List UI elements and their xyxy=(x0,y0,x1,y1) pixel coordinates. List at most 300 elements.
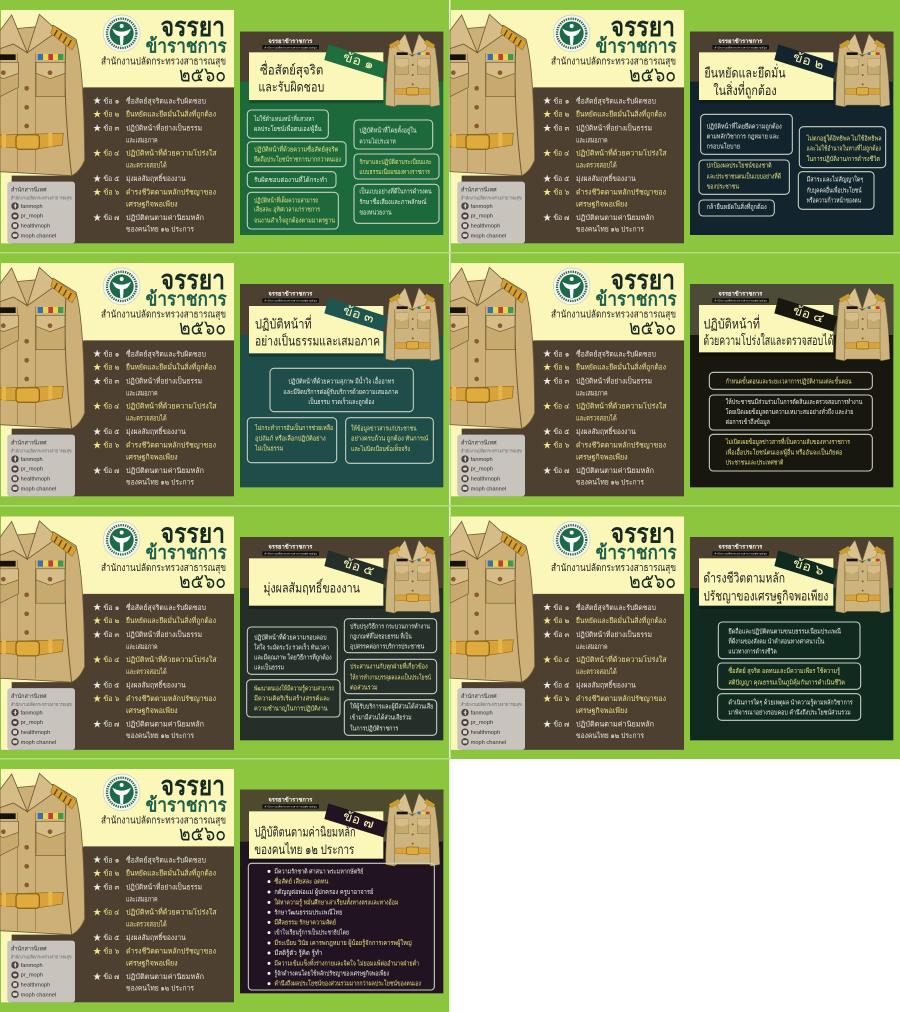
clause 5 boxes: ความชำนาญในการปฏิบัติงาน xyxy=(254,704,328,712)
social media box xyxy=(7,182,75,243)
clause 6 title: ดำรงชีวิตตามหลัก xyxy=(703,571,785,586)
clause 5 title: มุ่งผลสัมฤทธิ์ของงาน xyxy=(263,578,360,597)
main heading xyxy=(101,265,227,340)
list of seven ethics: ★ xyxy=(543,465,551,475)
list of seven ethics: ปฏิบัติตนตามค่านิยมหลัก xyxy=(576,466,654,475)
list of seven ethics xyxy=(93,854,217,993)
list of seven ethics: ของคนไทย ๑๒ ประการ xyxy=(576,731,644,740)
clause 4 boxes: ให้ประชาชนมีส่วนร่วมในการตัดสินและตรวจสอบการทำงาน xyxy=(726,398,863,406)
list of seven ethics: และตรวจสอบได้ xyxy=(126,414,167,423)
main heading: ข้าราชการ xyxy=(596,289,677,311)
list of seven ethics: ★ xyxy=(93,109,101,119)
social media box: healthmoph xyxy=(21,476,50,482)
poster 2 xyxy=(450,10,893,243)
clause 3 title: ปฏิบัติหน้าที่ xyxy=(255,314,312,331)
clause 3 boxes: อย่างครบถ้วน ถูกต้อง ทันการณ์ xyxy=(351,435,428,443)
list of seven ethics: ★ xyxy=(93,907,101,917)
clause 3 boxes: ไม่เป็นธรรม xyxy=(254,444,283,453)
social media box: สำนักงานปลัดกระทรวงสาธารณสุข xyxy=(11,448,72,454)
icon: ministry logo xyxy=(103,521,140,558)
list of seven ethics: ข้อ ๑ xyxy=(103,96,119,105)
icon: uniform shirt xyxy=(450,267,535,429)
list of seven ethics: ยืนหยัดและยึดมั่นในสิ่งที่ถูกต้อง xyxy=(126,868,216,878)
icon: ministry logo xyxy=(103,268,140,305)
ribbon: clause 3: ข้อ ๓ xyxy=(341,303,376,326)
main heading: สำนักงานปลัดกระทรวงสาธารณสุข xyxy=(551,309,676,320)
ribbon: clause 3 xyxy=(324,298,388,332)
list of seven ethics xyxy=(93,348,217,487)
clause 5 boxes: พัฒนาตนเองให้มีความรู้ความสามารถ xyxy=(254,684,334,692)
social media box: สำนักสารนิเทศ xyxy=(11,693,47,700)
list of seven ethics: เศรษฐกิจพอเพียง xyxy=(126,452,178,461)
poster 1 xyxy=(0,10,443,243)
list of seven ethics: ดำรงชีวิตตามหลักปรัชญาของ xyxy=(576,694,666,703)
list of seven ethics: ★ xyxy=(543,654,551,664)
list of seven ethics: ข้อ ๑ xyxy=(553,349,569,358)
clause 5 boxes: และมีคุณภาพ โดยวิธีการที่ถูกต้อง xyxy=(254,652,332,661)
clause 3 boxes: และไม่บิดเบือนข้อเท็จจริง xyxy=(351,444,410,453)
list of seven ethics: ยืนหยัดและยึดมั่นในสิ่งที่ถูกต้อง xyxy=(576,362,666,372)
clause 4 title: ปฏิบัติหน้าที่ xyxy=(703,314,760,331)
social media box: สำนักสารนิเทศ xyxy=(461,693,497,700)
clause 7 list box: มีความรักชาติ ศาสนา พระมหากษัตริย์ xyxy=(274,867,363,875)
social media box: สำนักสารนิเทศ xyxy=(11,187,47,194)
social media box: healthmoph xyxy=(21,223,50,229)
clause 7 list box: รักษาวัฒนธรรมประเพณีไทย xyxy=(274,908,342,916)
list of seven ethics xyxy=(543,348,667,487)
right panel 4 xyxy=(690,284,893,487)
clause 2 boxes: หรือความก้าวหน้าของตน xyxy=(807,197,861,205)
list of seven ethics: ข้อ ๒ xyxy=(103,110,119,119)
list of seven ethics: ข้อ ๗ xyxy=(553,213,570,222)
clause 1 boxes xyxy=(247,110,439,229)
icon: small shirt xyxy=(836,540,890,613)
list of seven ethics: ข้อ ๒ xyxy=(553,363,569,372)
ribbon: clause 7 xyxy=(324,803,388,837)
list of seven ethics: ข้อ ๑ xyxy=(553,603,569,612)
list of seven ethics xyxy=(543,602,667,740)
list of seven ethics: ปฏิบัติหน้าที่อย่างเป็นธรรม xyxy=(126,629,202,639)
main heading: จรรยา xyxy=(611,12,675,42)
clause 4 boxes: ต่อการเข้าถึงข้อมูล xyxy=(726,418,770,426)
list of seven ethics: ดำรงชีวิตตามหลักปรัชญาของ xyxy=(126,694,216,703)
list of seven ethics: ข้อ ๑ xyxy=(103,855,119,864)
list of seven ethics: ★ xyxy=(93,465,101,475)
right panel 5: จรรยาข้าราชการ xyxy=(268,543,313,551)
clause 7 title: ปฏิบัติตนตามค่านิยมหลัก xyxy=(254,825,356,840)
list of seven ethics: และตรวจสอบได้ xyxy=(576,161,617,170)
clause 7 list box: เข้าใจเรียนรู้การเป็นประชาธิปไตย xyxy=(274,928,349,937)
list of seven ethics: ★ xyxy=(93,173,101,183)
clause 7 list box: รู้จักดำรงตนโดยใช้หลักปรัชญาของเศรษฐกิจพอเพียง xyxy=(274,969,389,977)
ribbon: clause 4: ข้อ ๔ xyxy=(791,303,826,326)
social media box xyxy=(7,941,75,1002)
list of seven ethics: ข้อ ๖ xyxy=(103,694,120,703)
list of seven ethics: ★ xyxy=(93,376,101,386)
list of seven ethics: ข้อ ๖ xyxy=(103,947,120,956)
list of seven ethics: ★ xyxy=(543,680,551,690)
list of seven ethics: ★ xyxy=(543,719,551,729)
list of seven ethics: ★ xyxy=(93,362,101,372)
right panel 7: จรรยาข้าราชการ xyxy=(268,796,313,804)
clause 6 boxes: ซื่อสัตย์ สุจริต อดทนและมีความเพียร ใช้ความรู้ xyxy=(728,666,840,675)
list of seven ethics: ปฏิบัติตนตามค่านิยมหลัก xyxy=(126,719,204,728)
list of seven ethics: ของคนไทย ๑๒ ประการ xyxy=(126,731,194,740)
list of seven ethics: ข้อ ๕ xyxy=(553,680,570,689)
icon: small shirt xyxy=(386,34,440,107)
list of seven ethics: ★ xyxy=(543,426,551,436)
list of seven ethics: ★ xyxy=(93,187,101,197)
list of seven ethics: ★ xyxy=(93,719,101,729)
social media box: healthmoph xyxy=(471,476,500,482)
list of seven ethics: มุ่งผลสัมฤทธิ์ของงาน xyxy=(576,173,636,183)
clause 2 title: ในสิ่งที่ถูกต้อง xyxy=(713,81,777,99)
list of seven ethics: ซื่อสัตย์สุจริตและรับผิดชอบ xyxy=(126,348,206,358)
list of seven ethics: เศรษฐกิจพอเพียง xyxy=(576,706,628,715)
list of seven ethics: ข้อ ๓ xyxy=(103,377,119,386)
list of seven ethics: ★ xyxy=(543,362,551,372)
social media box xyxy=(457,182,525,243)
list of seven ethics: ข้อ ๖ xyxy=(553,441,570,450)
list of seven ethics: และตรวจสอบได้ xyxy=(576,667,617,676)
list of seven ethics: ข้อ ๑ xyxy=(553,96,569,105)
social media box: moph channel xyxy=(21,740,56,746)
list of seven ethics: ยืนหยัดและยึดมั่นในสิ่งที่ถูกต้อง xyxy=(126,615,216,625)
social media box xyxy=(457,435,525,496)
list of seven ethics: ข้อ ๗ xyxy=(103,972,120,981)
list of seven ethics: ยืนหยัดและยึดมั่นในสิ่งที่ถูกต้อง xyxy=(126,362,216,372)
right panel 3 xyxy=(240,284,443,487)
social media box: pr_moph xyxy=(21,972,43,978)
icon: uniform shirt xyxy=(0,521,85,682)
social media box: healthmoph xyxy=(21,982,50,988)
clause 6 title: ปรัชญาของเศรษฐกิจพอเพียง xyxy=(703,588,828,604)
list of seven ethics: ข้อ ๗ xyxy=(553,466,570,475)
clause 2 boxes: ในการปฏิบัติงาน/การดำรงชีวิต xyxy=(807,155,880,163)
clause 1 boxes: ปฏิบัติหน้าที่เต็มความสามารถ xyxy=(254,196,318,205)
clause 4 boxes: กำหนดขั้นตอนและระยะเวลาการปฏิบัติงานแต่ละขั้นตอน xyxy=(726,376,852,385)
clause 7 list box: มีสติรู้ตัว รู้คิด รู้ทำ xyxy=(274,949,323,957)
list of seven ethics: ของคนไทย ๑๒ ประการ xyxy=(576,478,644,487)
list of seven ethics: ข้อ ๖ xyxy=(103,441,120,450)
list of seven ethics: เศรษฐกิจพอเพียง xyxy=(126,958,178,967)
list of seven ethics: ข้อ ๒ xyxy=(553,616,569,625)
list of seven ethics: ปฏิบัติหน้าที่ด้วยความโปร่งใส xyxy=(126,654,217,664)
list of seven ethics: ข้อ ๔ xyxy=(553,149,570,158)
main heading: ๒๕๖๐ xyxy=(179,317,226,340)
social media box: fanmoph xyxy=(21,457,43,463)
clause 1 boxes: จนงานสำเร็จถูกต้องตามมาตรฐาน xyxy=(254,215,335,224)
social media box xyxy=(457,688,525,750)
list of seven ethics: ★ xyxy=(543,173,551,183)
clause 5 boxes: ในการปฏิบัติราชการ xyxy=(350,724,399,732)
clause 1 boxes: เป็นแบบอย่างที่ดีในการดำรงตน xyxy=(359,186,432,195)
ribbon: clause 7: ข้อ ๗ xyxy=(341,809,376,831)
list of seven ethics: ★ xyxy=(543,109,551,119)
list of seven ethics: ข้อ ๔ xyxy=(553,655,570,664)
list of seven ethics: ข้อ ๓ xyxy=(553,377,569,386)
clause 4 boxes: ประชาชนและประเทศชาติ xyxy=(726,458,783,466)
clause 3 title xyxy=(255,314,380,349)
list of seven ethics: ★ xyxy=(93,148,101,158)
list of seven ethics: ★ xyxy=(543,693,551,703)
right panel 3: สำนักงานปลัดกระทรวงสาธารณสุข ๒๕๖๐ xyxy=(264,299,317,304)
main heading: จรรยา xyxy=(161,518,225,548)
social media box: fanmoph xyxy=(21,963,43,969)
main heading xyxy=(101,12,227,87)
clause 1 boxes: ผลประโยชน์เพื่อตนเอง/ผู้อื่น xyxy=(254,124,322,133)
social media box: fanmoph xyxy=(21,710,43,716)
clause 2 boxes: กรอบนโยบาย xyxy=(707,142,740,150)
right panel 4: สำนักงานปลัดกระทรวงสาธารณสุข ๒๕๖๐ xyxy=(714,299,767,304)
clause 5 boxes: ต่อส่วนรวม xyxy=(350,684,378,691)
list of seven ethics: ซื่อสัตย์สุจริตและรับผิดชอบ xyxy=(126,854,206,864)
clause 2 boxes: และประชาชนตนเป็นแบบอย่างที่ดี xyxy=(707,171,781,180)
list of seven ethics: ข้อ ๒ xyxy=(553,110,569,119)
social media box: moph channel xyxy=(471,486,506,492)
right panel 2 xyxy=(690,32,893,235)
list of seven ethics: ★ xyxy=(93,654,101,664)
list of seven ethics: ★ xyxy=(93,426,101,436)
clause 2 boxes: กล้ายืนหยัดในสิ่งที่ถูกต้อง xyxy=(707,202,767,211)
social media box: สำนักสารนิเทศ xyxy=(461,187,497,194)
list of seven ethics: ของคนไทย ๑๒ ประการ xyxy=(126,225,194,234)
list of seven ethics: ซื่อสัตย์สุจริตและรับผิดชอบ xyxy=(126,602,206,612)
icon: ministry logo xyxy=(103,774,140,811)
social media box: pr_moph xyxy=(471,466,493,472)
list of seven ethics: ★ xyxy=(543,401,551,411)
list of seven ethics: และตรวจสอบได้ xyxy=(576,414,617,423)
clause 6 boxes: แนวทางการดำรงชีวิต xyxy=(728,648,777,656)
list of seven ethics: และเสมอภาค xyxy=(126,135,158,144)
clause 2 boxes: ตามหลักวิชาการ กฎหมาย และ xyxy=(707,132,779,140)
list of seven ethics: ★ xyxy=(93,971,101,981)
list of seven ethics: ข้อ ๖ xyxy=(553,188,570,197)
right panel 1 xyxy=(240,32,443,235)
social media box: moph channel xyxy=(471,740,506,746)
right panel 6: สำนักงานปลัดกระทรวงสาธารณสุข ๒๕๖๐ xyxy=(714,552,767,557)
clause 2 boxes xyxy=(699,114,886,216)
list of seven ethics: ★ xyxy=(93,629,101,639)
ribbon: clause 1 xyxy=(324,44,388,78)
poster 6 xyxy=(450,516,893,750)
clause 5 boxes: ปฏิบัติหน้าที่ด้วยความรอบคอบ xyxy=(254,632,327,641)
list of seven ethics: ข้อ ๗ xyxy=(103,213,120,222)
list of seven ethics: ปฏิบัติหน้าที่ด้วยความโปร่งใส xyxy=(126,148,217,158)
main heading: ๒๕๖๐ xyxy=(629,317,676,340)
clause 5 boxes: เข้ามามีส่วนได้ส่วนเสียร่วม xyxy=(350,713,412,721)
left panel 3 xyxy=(0,263,234,496)
list of seven ethics: ★ xyxy=(543,187,551,197)
main heading: สำนักงานปลัดกระทรวงสาธารณสุข xyxy=(101,563,226,574)
clause 2 boxes: กับบุคคลอื่นเพื่อประโยชน์ xyxy=(807,185,862,194)
clause 2 boxes: ไม่ตกอยู่ใต้อิทธิพล ไม่ใช้อิทธิพล xyxy=(806,135,882,143)
list of seven ethics: ข้อ ๒ xyxy=(103,363,119,372)
main heading: สำนักงานปลัดกระทรวงสาธารณสุข xyxy=(551,56,676,67)
clause 2 title xyxy=(704,64,786,99)
list of seven ethics: ★ xyxy=(93,602,101,612)
clause 1 boxes: ของหน่วยงาน xyxy=(359,209,392,216)
list of seven ethics: ★ xyxy=(93,693,101,703)
list of seven ethics: ข้อ ๒ xyxy=(103,869,119,878)
clause 1 boxes: ความไม่ประมาท xyxy=(359,137,396,145)
social media box: pr_moph xyxy=(21,720,43,726)
right panel 2: สำนักงานปลัดกระทรวงสาธารณสุข ๒๕๖๐ xyxy=(714,45,767,50)
clause 7 list box: ใฝ่หาความรู้ หมั่นศึกษาเล่าเรียนทั้งทางตรงและทางอ้อม xyxy=(274,897,398,906)
social media box: moph channel xyxy=(471,233,506,239)
main heading: จรรยา xyxy=(611,518,675,548)
clause 7 list box: มีศีลธรรม รักษาความสัตย์ xyxy=(274,918,336,926)
list of seven ethics: ซื่อสัตย์สุจริตและรับผิดชอบ xyxy=(576,348,656,358)
left panel 2 xyxy=(450,10,684,243)
clause 5 boxes: ประสานงานกับทุกฝ่ายที่เกี่ยวข้อง xyxy=(350,662,428,671)
social media box: moph channel xyxy=(21,486,56,492)
list of seven ethics: ดำรงชีวิตตามหลักปรัชญาของ xyxy=(576,188,666,197)
main heading xyxy=(101,518,227,593)
left panel 1 xyxy=(0,10,234,243)
clause 1 title: และรับผิดชอบ xyxy=(258,80,324,95)
list of seven ethics: ยืนหยัดและยึดมั่นในสิ่งที่ถูกต้อง xyxy=(576,109,666,119)
left panel 4 xyxy=(450,263,684,496)
list of seven ethics: ปฏิบัติหน้าที่ด้วยความโปร่งใส xyxy=(576,401,667,411)
list of seven ethics: ปฏิบัติตนตามค่านิยมหลัก xyxy=(126,213,204,222)
list of seven ethics: และตรวจสอบได้ xyxy=(126,161,167,170)
list of seven ethics: ★ xyxy=(543,148,551,158)
list of seven ethics: ปฏิบัติหน้าที่ด้วยความโปร่งใส xyxy=(576,654,667,664)
clause 3 boxes: ไม่กระทำการอันเป็นการช่วยเหลือ xyxy=(254,423,333,432)
clause 3 boxes: และมีจิตบริการต่อผู้รับบริการด้วยความเสมอภาค xyxy=(283,388,398,396)
list of seven ethics: ★ xyxy=(543,349,551,359)
ribbon: clause 1: ข้อ ๑ xyxy=(341,50,376,72)
clause 6 boxes: มาพิจารณาอย่างรอบคอบ คำนึงถึงประโยชน์ส่วนรวม xyxy=(728,708,851,716)
icon: ministry logo xyxy=(553,521,590,558)
social media box: fanmoph xyxy=(471,457,493,463)
icon: uniform shirt xyxy=(450,14,535,176)
list of seven ethics: ★ xyxy=(93,349,101,359)
right panel 2: จรรยาข้าราชการ xyxy=(718,37,763,45)
clause 3 boxes: เป็นธรรม รวดเร็วและถูกต้อง xyxy=(308,397,374,406)
list of seven ethics: ข้อ ๔ xyxy=(553,402,570,411)
social media box xyxy=(7,435,75,496)
list of seven ethics: ข้อ ๖ xyxy=(553,694,570,703)
main heading: สำนักงานปลัดกระทรวงสาธารณสุข xyxy=(101,56,226,67)
clause 3 boxes: ปฏิบัติหน้าที่ด้วยความสุภาพ มีน้ำใจ เอื้ออาทร xyxy=(288,376,395,385)
list of seven ethics: ปฏิบัติตนตามค่านิยมหลัก xyxy=(126,972,204,981)
list of seven ethics: ข้อ ๗ xyxy=(103,719,120,728)
list of seven ethics: ปฏิบัติหน้าที่อย่างเป็นธรรม xyxy=(126,376,202,386)
list of seven ethics: มุ่งผลสัมฤทธิ์ของงาน xyxy=(126,426,186,436)
main heading xyxy=(551,12,677,87)
clause 5 boxes: อุปสรรคต่อการบริการประชาชน xyxy=(350,643,425,651)
clause 6 boxes: สติปัญญา คุณธรรมเป็นภูมิคุ้มกันการดำเนินชีวิต xyxy=(728,677,845,686)
list of seven ethics: และตรวจสอบได้ xyxy=(126,667,167,676)
list of seven ethics: ★ xyxy=(543,212,551,222)
social media box: fanmoph xyxy=(471,204,493,210)
social media box: pr_moph xyxy=(471,720,493,726)
social media box: fanmoph xyxy=(21,204,43,210)
icon: small shirt xyxy=(836,34,890,107)
clause 5 boxes: ใส่ใจ ระมัดระวัง รวดเร็ว ทันเวลา xyxy=(254,642,329,651)
left panel 6 xyxy=(450,516,684,750)
right panel 3: จรรยาข้าราชการ xyxy=(268,290,313,298)
list of seven ethics: ข้อ ๔ xyxy=(103,655,120,664)
icon: small shirt xyxy=(836,288,890,361)
clause 5 boxes xyxy=(247,619,437,735)
social media box: pr_moph xyxy=(471,213,493,219)
ribbon: clause 6: ข้อ ๖ xyxy=(791,556,826,578)
main heading: จรรยา xyxy=(611,265,675,295)
list of seven ethics: ★ xyxy=(93,615,101,625)
right panel 7: สำนักงานปลัดกระทรวงสาธารณสุข ๒๕๖๐ xyxy=(264,805,317,810)
icon: uniform shirt xyxy=(0,267,85,429)
social media box: fanmoph xyxy=(471,710,493,716)
clause 4 title: ด้วยความโปร่งใสและตรวจสอบได้ xyxy=(703,332,833,348)
list of seven ethics: ★ xyxy=(93,212,101,222)
main heading xyxy=(551,265,677,340)
left panel 5 xyxy=(0,516,234,750)
list of seven ethics: ★ xyxy=(543,376,551,386)
clause 1 boxes: แบบธรรมเนียมของทางราชการ xyxy=(359,168,430,176)
clause 3 boxes xyxy=(247,368,433,463)
main heading: ๒๕๖๐ xyxy=(179,823,226,846)
social media box: healthmoph xyxy=(21,730,50,736)
clause 2 boxes: ของประชาชน xyxy=(707,183,739,190)
list of seven ethics: ★ xyxy=(543,602,551,612)
social media box: สำนักสารนิเทศ xyxy=(461,440,497,447)
list of seven ethics: ปฏิบัติหน้าที่อย่างเป็นธรรม xyxy=(576,123,652,133)
clause 6 title xyxy=(703,571,828,604)
clause 1 boxes: ปฏิบัติหน้าที่ด้วยความซื่อสัตย์สุจริต xyxy=(254,145,338,154)
list of seven ethics: ★ xyxy=(93,868,101,878)
clause 6 boxes: ที่ดีงามของสังคม นำคำสอนทางศาสนาเป็น xyxy=(728,637,825,646)
social media box: moph channel xyxy=(21,992,56,998)
clause 3 boxes: ให้ข้อมูลข่าวสารแก่ประชาชน xyxy=(351,425,417,433)
main heading: ๒๕๖๐ xyxy=(179,64,226,87)
clause 1 title: ซื่อสัตย์สุจริต xyxy=(260,60,323,78)
main heading: จรรยา xyxy=(161,12,225,42)
right panel 6: จรรยาข้าราชการ xyxy=(718,543,763,551)
main heading: สำนักงานปลัดกระทรวงสาธารณสุข xyxy=(101,309,226,320)
list of seven ethics: ข้อ ๗ xyxy=(553,719,570,728)
list of seven ethics: ของคนไทย ๑๒ ประการ xyxy=(126,984,194,993)
clause 5 boxes: มีความคิดริเริ่มสร้างสรรค์และ xyxy=(254,693,330,702)
list of seven ethics: ข้อ ๖ xyxy=(103,188,120,197)
main heading: ข้าราชการ xyxy=(146,795,227,817)
clause 7 title: ของคนไทย ๑๒ ประการ xyxy=(254,842,354,857)
poster 7 xyxy=(0,769,443,1002)
main heading: ๒๕๖๐ xyxy=(179,570,226,593)
clause 4 title xyxy=(703,314,833,348)
clause 4 boxes: ไม่เปิดเผยข้อมูลข่าวสารที่เป็นความลับของทางราชการ xyxy=(725,437,850,446)
list of seven ethics: ปฏิบัติตนตามค่านิยมหลัก xyxy=(576,213,654,222)
main heading xyxy=(551,518,677,593)
list of seven ethics: ข้อ ๕ xyxy=(553,174,570,183)
list of seven ethics: ปฏิบัติหน้าที่ด้วยความโปร่งใส xyxy=(126,401,217,411)
list of seven ethics: ของคนไทย ๑๒ ประการ xyxy=(576,225,644,234)
social media box: healthmoph xyxy=(471,223,500,229)
list of seven ethics: เศรษฐกิจพอเพียง xyxy=(576,199,628,208)
clause 4 boxes: เพื่อเอื้อประโยชน์ตนเอง/ผู้อื่น หรืออันจะเป็นภัยต่อ xyxy=(726,447,842,456)
icon: small shirt xyxy=(386,793,440,866)
list of seven ethics: ★ xyxy=(543,615,551,625)
clause 1 boxes: รับผิดชอบต่องานที่ได้กระทำ xyxy=(254,175,328,184)
main heading: ข้าราชการ xyxy=(146,289,227,311)
clause 2 boxes: มีสาระและไม่สัญญาใดๆ xyxy=(807,176,864,184)
list of seven ethics: ดำรงชีวิตตามหลักปรัชญาของ xyxy=(576,441,666,450)
list of seven ethics: ปฏิบัติหน้าที่ด้วยความโปร่งใส xyxy=(126,907,217,917)
left panel 7 xyxy=(0,769,234,1002)
list of seven ethics: ข้อ ๕ xyxy=(103,933,120,942)
